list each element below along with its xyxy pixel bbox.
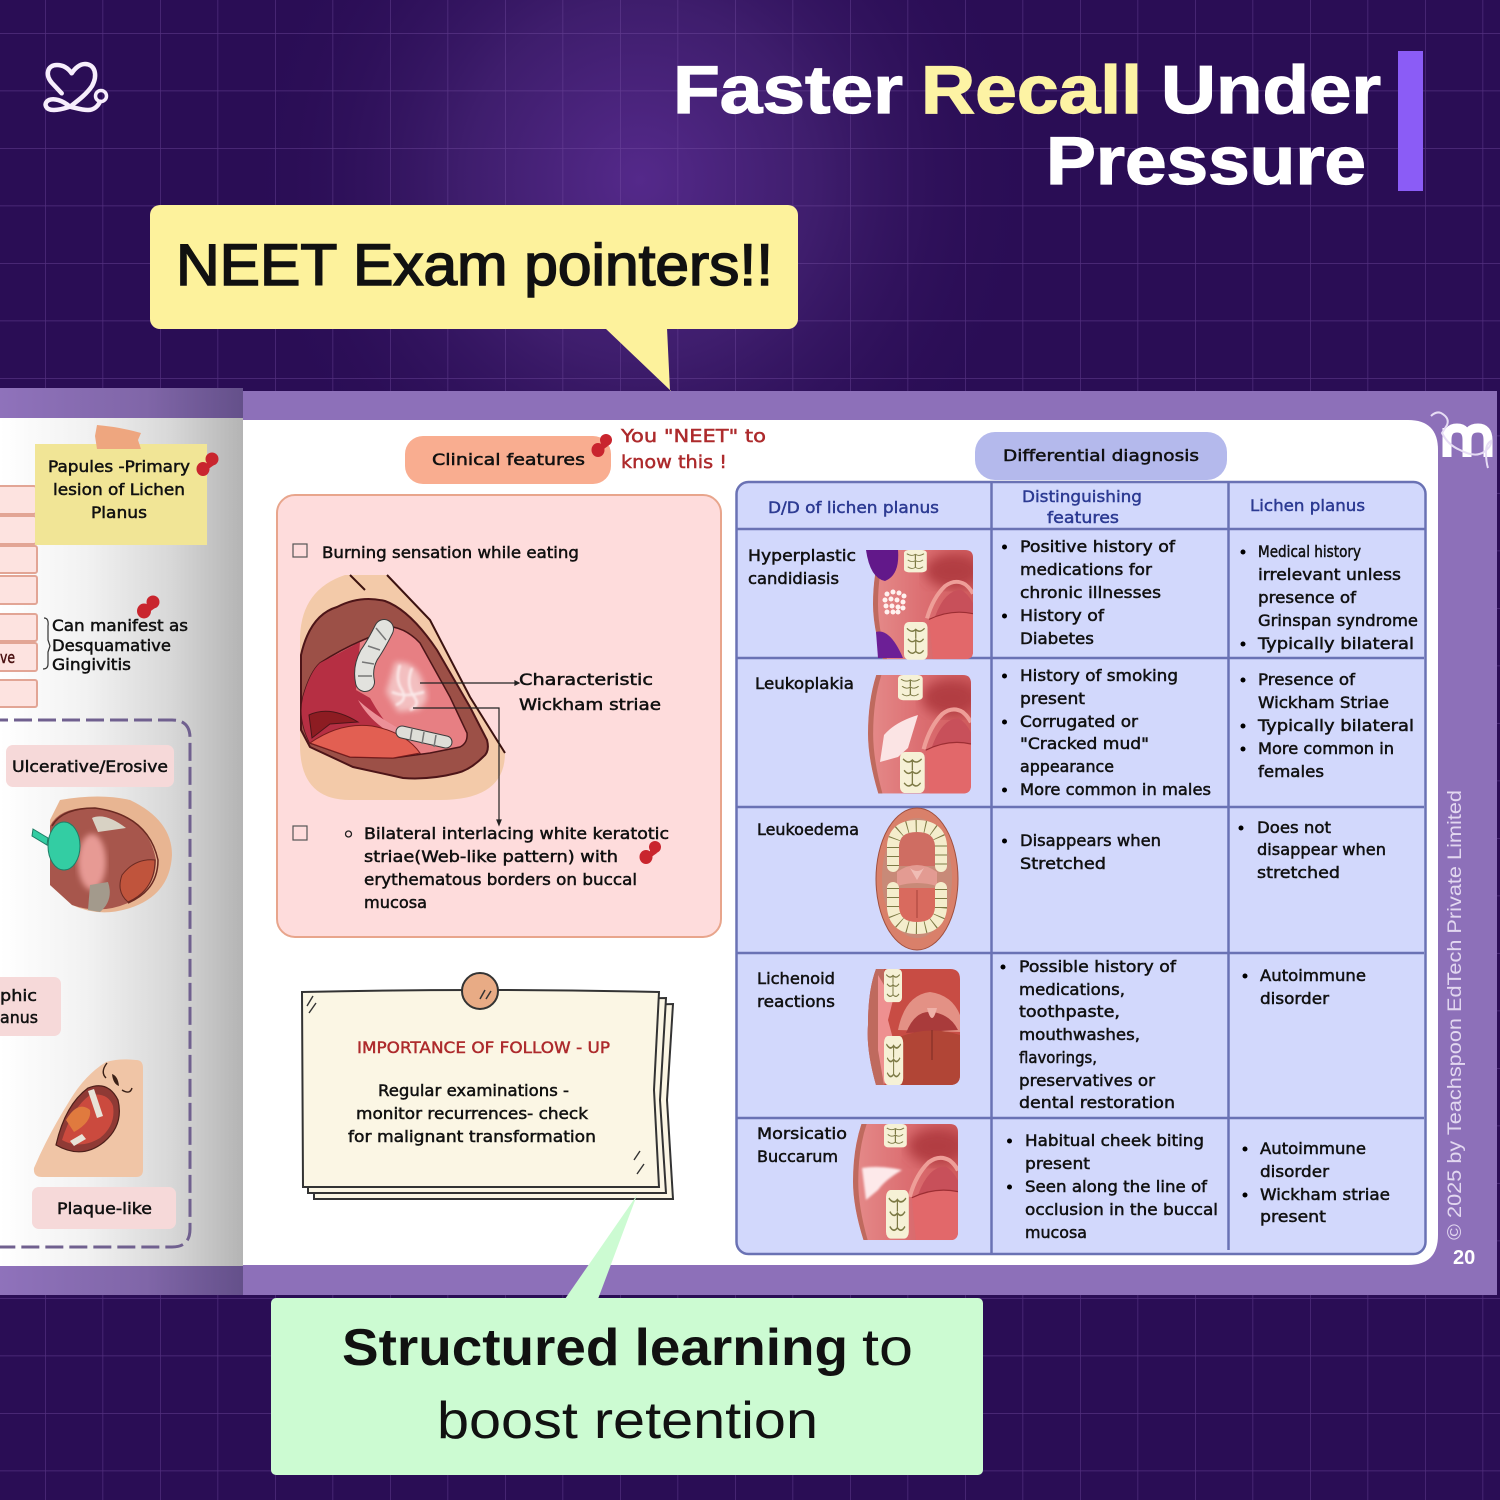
row: hyperplastic candidiasis: presence of (1258, 588, 1356, 607)
row: leukoplakia: Leukoplakia (755, 674, 854, 693)
title: Under (1161, 52, 1381, 128)
row: leukoplakia: More common in (1258, 739, 1394, 758)
row: lichenoid reactions: Autoimmune (1260, 966, 1366, 985)
checkbox: bilateral striae (293, 826, 307, 840)
callout: NEET exam pointers (150, 205, 798, 391)
table: differential diagnosis (736, 482, 1426, 1254)
row: lichenoid reactions: Lichenoid (757, 969, 835, 988)
row: leukoplakia: "Cracked mud" (1020, 734, 1149, 753)
row: morsicatio buccarum: Seen along the line of (1025, 1177, 1207, 1196)
row: hyperplastic candidiasis: History of (1020, 606, 1104, 625)
table header: Lichen planus (1250, 496, 1365, 515)
label: ulcerative erosive (6, 745, 174, 787)
label: atrophic lichen planus fragment: phic (0, 986, 37, 1005)
title: Faster (673, 52, 903, 128)
row: hyperplastic candidiasis: irrelevant unless (1258, 565, 1401, 584)
heading: clinical features (405, 436, 611, 484)
callout: structured learning: to (862, 1319, 913, 1377)
checkbox: burning sensation (293, 544, 307, 557)
row: hyperplastic candidiasis: chronic illnesses (1020, 583, 1161, 602)
row: morsicatio buccarum: disorder (1260, 1162, 1329, 1181)
sticky note: papules: lesion of Lichen (53, 480, 185, 499)
row: hyperplastic candidiasis: Medical history (1258, 542, 1361, 561)
pin: bilateral striae (640, 841, 661, 864)
row: hyperplastic candidiasis: candidiasis (748, 569, 839, 588)
brace and desquamative note (43, 616, 188, 674)
row: lichenoid reactions: reactions (757, 992, 835, 1011)
title (673, 52, 1381, 199)
text: follow-up body: for malignant transformation (348, 1127, 596, 1146)
row: leukoplakia: present (1020, 689, 1085, 708)
text: bilateral striae: erythematous borders on buccal (364, 870, 637, 889)
row: leukoplakia: History of smoking (1020, 666, 1178, 685)
title: Pressure (1046, 123, 1366, 199)
label: atrophic lichen planus fragment: anus (0, 1008, 38, 1027)
row: hyperplastic candidiasis: Grinspan syndrome (1258, 611, 1418, 630)
label: plaque-like (32, 1187, 176, 1229)
row: leukoplakia: More common in males (1020, 780, 1211, 799)
row: leukoplakia: Typically bilateral (1257, 716, 1414, 735)
title: Recall (921, 52, 1142, 128)
row: leukoplakia: Presence of (1258, 670, 1355, 689)
label: ulcerative erosive: Ulcerative/Erosive (12, 757, 168, 776)
row: leukoplakia (755, 666, 1414, 799)
illustration: morsicatio (853, 1124, 966, 1240)
brace and desquamative note: Desquamative (52, 636, 171, 655)
text: bilateral striae (364, 824, 669, 912)
text: bilateral striae: mucosa (364, 893, 427, 912)
label: atrophic lichen planus fragment (0, 977, 61, 1036)
row: hyperplastic candidiasis: Typically bilateral (1257, 634, 1414, 653)
row: morsicatio buccarum: Wickham striae (1260, 1185, 1390, 1204)
text: follow-up body: Regular examinations - (378, 1081, 569, 1100)
copyright note: © 2025 by Teachspoon EdTech Private Limited (1445, 790, 1466, 1240)
heading: differential diagnosis: Differential diagnosis (1003, 446, 1199, 465)
row: leukoedema: Leukoedema (757, 820, 859, 839)
row: lichenoid reactions: medications, (1019, 980, 1125, 999)
panel: textbook spread (0, 388, 1497, 1295)
row: lichenoid reactions: disorder (1260, 989, 1329, 1008)
row: leukoedema: Stretched (1020, 854, 1106, 873)
row: morsicatio buccarum (757, 1124, 1390, 1242)
dashed frame: lichen planus types (0, 720, 190, 1247)
heading: differential diagnosis (975, 432, 1227, 480)
arrow: to Wickham striae label (420, 681, 519, 685)
heading: importance of follow-up: IMPORTANCE OF FOLLOW - UP (357, 1038, 610, 1057)
row: morsicatio buccarum: present (1260, 1207, 1326, 1226)
label: characteristic Wickham striae: Wickham striae (519, 695, 661, 714)
row: leukoplakia: females (1258, 762, 1324, 781)
row: morsicatio buccarum: Buccarum (757, 1147, 838, 1166)
row: hyperplastic candidiasis: Positive history of (1020, 537, 1175, 556)
callout: NEET exam pointers: NEET Exam pointers!! (176, 233, 773, 298)
row: lichenoid reactions: flavorings, (1019, 1048, 1097, 1067)
row: leukoplakia: appearance (1020, 757, 1114, 776)
heading: clinical features: Clinical features (432, 450, 585, 469)
text: burning sensation: Burning sensation while eating (322, 543, 579, 562)
row: lichenoid reactions: toothpaste, (1019, 1002, 1120, 1021)
table header: features (1047, 508, 1119, 527)
pin: sticky note (196, 452, 218, 476)
row: morsicatio buccarum: Autoimmune (1260, 1139, 1366, 1158)
text: follow-up body (348, 1081, 596, 1146)
text: bilateral striae: Bilateral interlacing white keratotic (364, 824, 669, 843)
panel: clinical features (277, 495, 721, 937)
callout: structured learning: boost retention (437, 1392, 818, 1450)
sticky note: papules: Papules -Primary (48, 457, 190, 476)
sticky note: papules: Planus (91, 503, 147, 522)
label: plaque-like: Plaque-like (57, 1199, 152, 1218)
bullet: hollow (346, 831, 352, 837)
row: morsicatio buccarum: mucosa (1025, 1223, 1087, 1242)
row: hyperplastic candidiasis: medications for (1020, 560, 1152, 579)
row: lichenoid reactions: Possible history of (1019, 957, 1176, 976)
row: leukoplakia: Wickham Striae (1258, 693, 1389, 712)
row: morsicatio buccarum: Habitual cheek biting (1025, 1131, 1204, 1150)
row: hyperplastic candidiasis: Hyperplastic (748, 546, 856, 565)
pin: note circle (462, 973, 498, 1009)
row: leukoedema: disappear when (1257, 840, 1386, 859)
panel: follow-up note (302, 973, 673, 1199)
title accent bar (1398, 51, 1423, 191)
row: lichenoid reactions (757, 957, 1366, 1112)
label: characteristic Wickham striae: Characteristic (519, 670, 653, 689)
callout: you NEET to know this: know this ! (621, 452, 727, 473)
pin: clinical features (592, 434, 612, 457)
row: lichenoid reactions: preservatives or (1019, 1071, 1155, 1090)
brace and desquamative note: Can manifest as (52, 616, 188, 635)
row: leukoedema: Does not (1257, 818, 1331, 837)
callout: you NEET to know this (620, 426, 766, 473)
left page: box label fragment: ve (0, 648, 15, 667)
illustration: plaque-like mouth in profile (34, 1059, 143, 1177)
callout: structured learning (271, 1195, 983, 1475)
row: morsicatio buccarum: occlusion in the buccal (1025, 1200, 1218, 1219)
text: follow-up body: monitor recurrences- check (356, 1104, 589, 1123)
row: morsicatio buccarum: present (1025, 1154, 1090, 1173)
label: characteristic Wickham striae (519, 670, 661, 714)
arrow: to keratotic striae text (413, 708, 501, 825)
table header: Distinguishing (1022, 487, 1142, 506)
illustration: lichenoid (868, 969, 960, 1085)
callout: you NEET to know this: You "NEET" to (620, 426, 766, 447)
page number: 20 (1453, 1247, 1475, 1269)
table header: D/D of lichen planus (768, 498, 939, 517)
icon: m logo with stethoscope (1431, 412, 1491, 468)
row: hyperplastic candidiasis (748, 537, 1418, 660)
icon: heart stethoscope logo (46, 64, 106, 110)
pin: gingivitis note (137, 596, 160, 618)
row: leukoedema: stretched (1257, 863, 1340, 882)
text: bilateral striae: striae(Web-like pattern) with (364, 847, 618, 866)
row: lichenoid reactions: mouthwashes, (1019, 1025, 1140, 1044)
illustration: open mouth front view (876, 808, 958, 950)
callout: structured learning: Structured learning (342, 1319, 848, 1377)
row: leukoplakia: Corrugated or (1020, 712, 1138, 731)
brace and desquamative note: Gingivitis (52, 655, 131, 674)
table header (768, 487, 1365, 527)
row: leukoedema (757, 808, 1386, 950)
row: hyperplastic candidiasis: Diabetes (1020, 629, 1094, 648)
row: leukoedema: Disappears when (1020, 831, 1161, 850)
sticky note: papules (35, 425, 207, 545)
illustration: ulcerative mouth with mirror (32, 796, 172, 912)
illustration: mouth with Wickham striae (300, 575, 505, 800)
illustration: leukoplakia (868, 675, 979, 793)
illustration: candidiasis (866, 550, 981, 660)
row: lichenoid reactions: dental restoration (1019, 1093, 1175, 1112)
row: morsicatio buccarum: Morsicatio (757, 1124, 847, 1143)
left page: symptom boxes (0, 486, 37, 707)
